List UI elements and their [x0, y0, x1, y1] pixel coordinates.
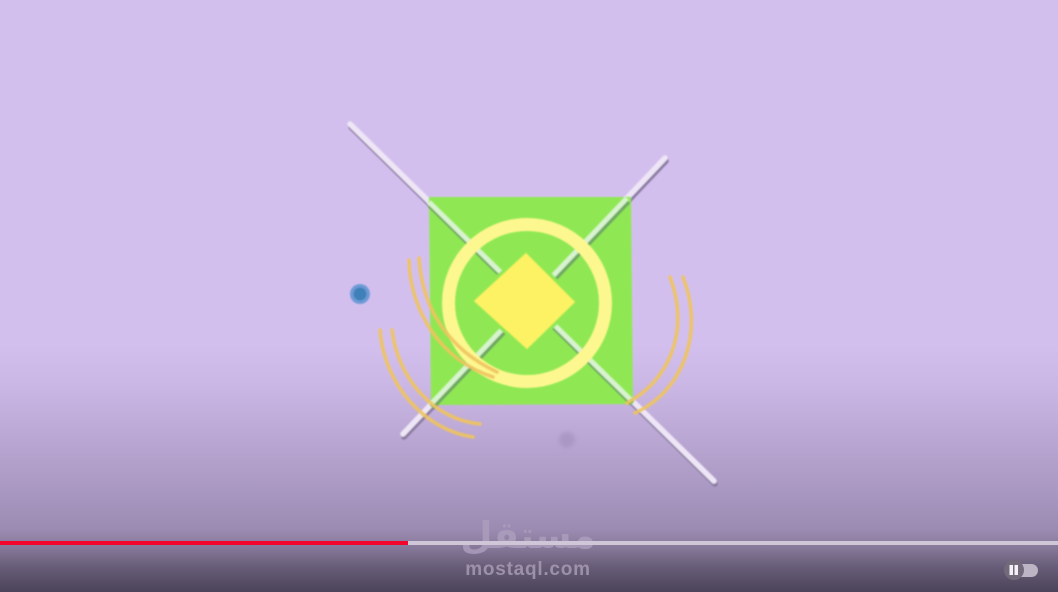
pause toggle	[1004, 560, 1038, 580]
crossed line shadows and lines outside the square	[350, 124, 715, 484]
green square	[429, 197, 633, 405]
watermark: site name: mostaql.com	[465, 559, 591, 580]
orange arcs: lower left	[380, 330, 480, 437]
orange arcs: upper left	[409, 258, 497, 377]
icon: faint purple dot	[559, 432, 575, 448]
progress bar played portion	[0, 541, 408, 545]
progress bar track	[0, 541, 1058, 545]
yellow diamond	[474, 253, 575, 349]
orange arcs: right	[627, 277, 691, 413]
yellow ring	[448, 224, 606, 382]
watermark: Arabic logo: مستقل	[460, 514, 596, 557]
crossed lines over the square	[429, 198, 632, 407]
icon: blue dot	[350, 284, 370, 304]
